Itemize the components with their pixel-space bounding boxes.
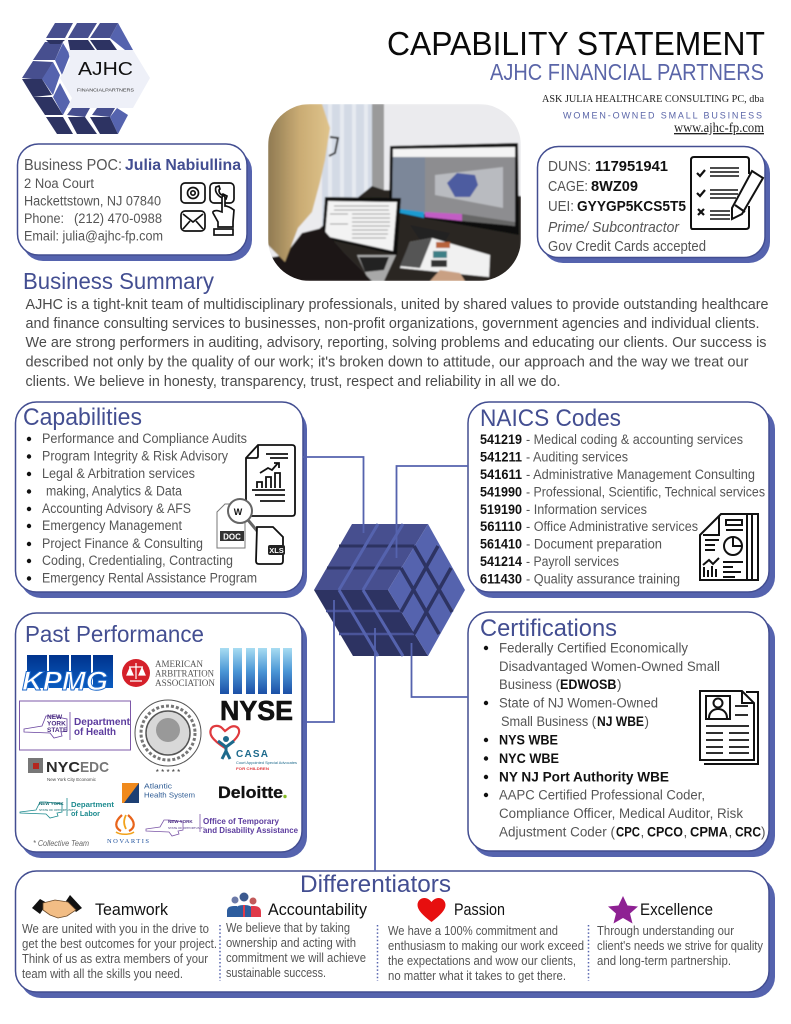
panel: registration identifiers: GYYGP5KCS5T5 (577, 198, 686, 215)
logo: New York Department of Labor: NEW YORK (39, 801, 64, 806)
text block: accountability: ownership and acting with (226, 936, 356, 950)
list: NAICS codes: - Auditing services (526, 450, 628, 464)
list: certifications: NJ WBE (597, 714, 644, 729)
title: CAPABILITY STATEMENT (387, 26, 765, 63)
list: certifications: ) (644, 714, 649, 729)
logo: New York Department of Labor (20, 798, 115, 818)
list: capabilities: Emergency Management (42, 518, 182, 533)
panel: capabilities (16, 402, 307, 598)
heading: differentiators: Differentiators (300, 871, 451, 898)
panel: business point of contact: Hackettstown, NJ 07840 (24, 194, 161, 208)
text block: teamwork: get the best outcomes for your project. (22, 937, 217, 951)
icon: checklist and pencil (691, 157, 763, 229)
heading: NAICS codes: NAICS Codes (480, 405, 621, 432)
icon: report with chart and document search: XLS (269, 546, 284, 555)
logo: NYCEDC (28, 758, 109, 782)
list: certifications: Disadvantaged Women-Owned Small (499, 659, 720, 674)
list: capabilities: Accounting Advisory & AFS (42, 501, 191, 516)
list: NAICS codes: 541990 (480, 484, 522, 500)
list: NAICS codes: 561410 (480, 536, 522, 552)
logo: NYCEDC: New York City Economic (47, 777, 96, 782)
list: certifications: NYC WBE (499, 751, 559, 766)
list: capabilities: Legal & Arbitration services (42, 466, 195, 481)
text block: accountability: We believe that by taking (226, 921, 350, 935)
list: certifications: CPCO (647, 824, 683, 840)
heading: capabilities: Capabilities (23, 404, 142, 431)
panel: registration identifiers: 8WZ09 (591, 178, 638, 195)
list: certifications: CPC (616, 824, 640, 840)
logo: American Arbitration Association: AMERICAN (155, 659, 203, 669)
logo: Deloitte: Deloitte (218, 784, 283, 802)
text block: teamwork: Think of us as extra members of your (22, 952, 208, 966)
list: NAICS codes: 541611 (480, 467, 522, 482)
logo: New York State Department of Health: STATE (47, 727, 68, 734)
list: capabilities (27, 431, 257, 586)
panel: NAICS codes (468, 402, 775, 598)
logo: New York State Department of Health: NEW (47, 714, 63, 721)
logo: New York State Department of Health: Department (74, 717, 131, 728)
text block: excellence: client's needs we strive for quality (597, 939, 764, 953)
text block: business summary: We are strong performers in auditing, advisory, reporting, solving problems and educating our clients. Our success is (26, 335, 766, 351)
list: capabilities: Performance and Compliance Audits (42, 431, 247, 446)
panel: business point of contact: Business POC: (24, 157, 122, 174)
list: certifications: EDWOSB (560, 677, 617, 692)
connector: NAICS codes to cube (396, 466, 468, 558)
list: certifications: AAPC Certified Professional Coder, (499, 788, 705, 802)
panel: business point of contact: (212) 470-0988 (74, 211, 162, 226)
list: certifications: Small Business ( (501, 714, 596, 729)
logo: American Arbitration Association: ARBITRATION (155, 668, 214, 678)
list: NAICS codes: 611430 (480, 572, 522, 586)
logo: New York Office of Temporary and Disability Assistance: and Disability Assistance (203, 826, 299, 835)
logo: Atlantic Health System: Atlantic (144, 782, 172, 790)
panel: business point of contact: 2 Noa Court (24, 176, 94, 191)
logo: New York State Department of Health: YORK (47, 720, 66, 728)
logo: New York Department of Labor: Department (71, 800, 115, 809)
label: excellence: Excellence (640, 900, 713, 919)
logo: AJHC Financial Partners cube: AJHC (78, 59, 133, 79)
list: NAICS codes: - Office Administrative services (526, 519, 698, 534)
panel: registration identifiers (538, 146, 770, 263)
connector: past performance to cube (303, 600, 334, 722)
text block: accountability: sustainable success. (226, 966, 326, 980)
note: collective team: * Collective Team (33, 839, 89, 848)
text block: passion (388, 924, 584, 983)
logo: American Arbitration Association: ASSOCIATION (155, 678, 215, 688)
list: certifications: , (684, 824, 687, 840)
text block: teamwork: team with all the skills you need. (22, 967, 183, 981)
list: NAICS codes: 541214 (480, 554, 522, 569)
icon: resume document (700, 691, 758, 764)
text block: business summary: AJHC is a tight-knit team of multidisciplinary professionals, united by shared values to provide outstanding healthcare (26, 297, 768, 313)
title: www.ajhc-fp.com (674, 120, 764, 135)
logo: Atlantic Health System (122, 782, 195, 803)
connector: capabilities to cube (303, 457, 364, 533)
list: NAICS codes: 541219 (480, 432, 522, 447)
icon: star (608, 896, 638, 924)
panel: differentiators (16, 871, 775, 998)
logo: New York Office of Temporary and Disability Assistance: Office of Temporary (203, 817, 280, 826)
list: NAICS codes: - Administrative Management Consulting (526, 467, 755, 482)
logo: CASA: CASA (236, 749, 268, 760)
list: capabilities: Coding, Credentialing, Contracting (42, 553, 233, 568)
panel: registration identifiers: DUNS: (548, 158, 591, 175)
logo: American Arbitration Association (122, 659, 215, 688)
logo: KPMG (22, 655, 113, 696)
heading: past performance: Past Performance (25, 621, 204, 647)
list: capabilities: Program Integrity & Risk Advisory (42, 448, 228, 464)
panel: past performance (16, 613, 307, 858)
panel: registration identifiers: 117951941 (595, 158, 668, 175)
list: NAICS codes: - Document preparation (526, 536, 662, 552)
panel: business point of contact (18, 144, 252, 261)
heading: business summary: Business Summary (23, 268, 214, 294)
panel: business point of contact: Email: julia@ajhc-fp.com (24, 228, 163, 244)
title: WOMEN-OWNED SMALL BUSINESS (563, 110, 762, 120)
text block: passion: enthusiasm to making our work exceed (388, 939, 584, 953)
logo: CASA: FOR CHILDREN (236, 767, 269, 771)
list: certifications: NY NJ Port Authority WBE (499, 770, 669, 784)
list: capabilities: Emergency Rental Assistance Program (42, 570, 257, 586)
panel: registration identifiers: Prime/ Subcontractor (548, 219, 680, 236)
logo: New York Department of Labor: of Labor (71, 809, 100, 818)
label: teamwork: Teamwork (95, 900, 168, 919)
text block: passion: the expectations and wow our clients, (388, 954, 576, 968)
logo: KPMG: KPMG (22, 666, 108, 696)
connector: differentiators to cube (374, 628, 376, 871)
list: capabilities: making, Analytics & Data (46, 484, 182, 498)
list: NAICS codes: 519190 (480, 502, 522, 517)
list: certifications (484, 640, 766, 840)
icon: handshake (32, 895, 82, 918)
list: certifications: ) (761, 824, 766, 840)
icon: people group (227, 892, 261, 917)
text block: business summary: described not only by the quality of our work; it's broken down to attitude, our approach and the way we treat our (26, 354, 749, 370)
logo: NYSE (220, 648, 293, 726)
photo: woman working at laptop and monitor (268, 104, 521, 281)
panel: registration identifiers: Gov Credit Cards accepted (548, 238, 706, 255)
logo: NYC Office of the Comptroller seal (135, 700, 201, 777)
icon: contact at, phone, envelope and pointer (181, 183, 234, 235)
text block: business summary: and finance consulting services to businesses, non-profit organizations, government agencies and individual clients. (26, 316, 760, 332)
panel: certifications (468, 612, 775, 857)
logo: NYCEDC: NYC (46, 759, 80, 776)
list: certifications: CRC (735, 824, 761, 840)
list: NAICS codes: 561110 (480, 519, 522, 534)
text block: excellence: Through understanding our (597, 924, 734, 938)
text block: business summary (26, 297, 768, 390)
list: NAICS codes: - Quality assurance training (526, 572, 680, 586)
central cube graphic (314, 524, 465, 656)
list: certifications: Compliance Officer, Medical Auditor, Risk (499, 806, 743, 821)
text block: business summary: clients. We believe in honesty, transparency, trust, respect and reliability in all we do. (26, 374, 560, 390)
logo: New York Office of Temporary and Disability Assistance: STATE OF OPPORTUNITY (168, 826, 205, 830)
list: certifications: CPMA (690, 824, 728, 840)
icon: report with chart and document search: DOC (223, 532, 241, 542)
logo: NYCEDC: EDC (80, 759, 109, 776)
list: certifications: , (728, 824, 732, 840)
title: ASK JULIA HEALTHCARE CONSULTING PC, dba (542, 93, 764, 105)
text block: excellence: and long-term partnership. (597, 954, 731, 968)
logo: AJHC Financial Partners cube: FINANCIALPARTNERS (77, 88, 134, 92)
list: certifications: NYS WBE (499, 732, 558, 748)
label: accountability: Accountability (268, 900, 367, 919)
logo: CASA: Court Appointed Special Advocates (236, 761, 297, 765)
label: passion: Passion (454, 900, 505, 919)
text block: accountability (226, 921, 366, 980)
list: NAICS codes: - Payroll services (526, 554, 619, 569)
list: NAICS codes: - Professional, Scientific, Technical services (526, 484, 765, 500)
list: certifications: Adjustment Coder ( (499, 824, 615, 840)
icon: report with chart and document search (217, 445, 295, 564)
logo: New York State Department of Health: of Health (74, 727, 116, 738)
title (387, 26, 765, 135)
panel: registration identifiers: CAGE: (548, 178, 588, 195)
icon: heart (418, 898, 446, 922)
panel: business point of contact: Phone: (24, 211, 64, 226)
panel: registration identifiers: UEI: (548, 198, 574, 215)
text block: teamwork (22, 922, 217, 981)
connector: certifications to cube (412, 643, 468, 697)
list: certifications: State of NJ Women-Owned (499, 696, 658, 710)
list: NAICS codes: 541211 (480, 450, 522, 464)
text block: passion: We have a 100% commitment and (388, 924, 558, 938)
logo: CASA (210, 726, 297, 771)
list: certifications: Federally Certified Economically (499, 640, 688, 656)
text block: excellence (597, 924, 764, 968)
heading: certifications: Certifications (480, 615, 617, 642)
logo: NYSE: NYSE (220, 695, 293, 726)
panel: business point of contact: Julia Nabiullina (125, 157, 241, 174)
logo: New York Office of Temporary and Disability Assistance (146, 814, 299, 836)
logo: New York Office of Temporary and Disability Assistance: NEW YORK (168, 819, 193, 824)
logo: Atlantic Health System: Health System (144, 790, 195, 800)
logo: AJHC Financial Partners cube (22, 23, 150, 134)
list: certifications: ) (617, 677, 622, 692)
list: NAICS codes (480, 432, 765, 586)
logo: New York State Department of Health (20, 701, 131, 750)
logo: Novartis: NOVARTIS (107, 838, 149, 845)
list: certifications: Business ( (499, 677, 560, 692)
text block: passion: no matter what it takes to get there. (388, 969, 566, 983)
logo: New York Department of Labor: STATE OF OPPORTUNITY (39, 808, 76, 812)
list: NAICS codes: - Information services (526, 502, 647, 517)
text block: teamwork: We are united with you in the drive to (22, 922, 209, 936)
icon: report with chart and document search: W (234, 507, 243, 517)
list: certifications: , (640, 824, 644, 840)
list: NAICS codes: - Medical coding & accounting services (526, 432, 743, 447)
logo: Novartis (107, 815, 149, 845)
text block: accountability: commitment we will achieve (226, 951, 366, 965)
logo: NYC Office of the Comptroller seal: * * * * * (156, 768, 180, 777)
list: capabilities: Project Finance & Consulting (42, 536, 203, 551)
icon: report with pie chart (700, 514, 758, 580)
